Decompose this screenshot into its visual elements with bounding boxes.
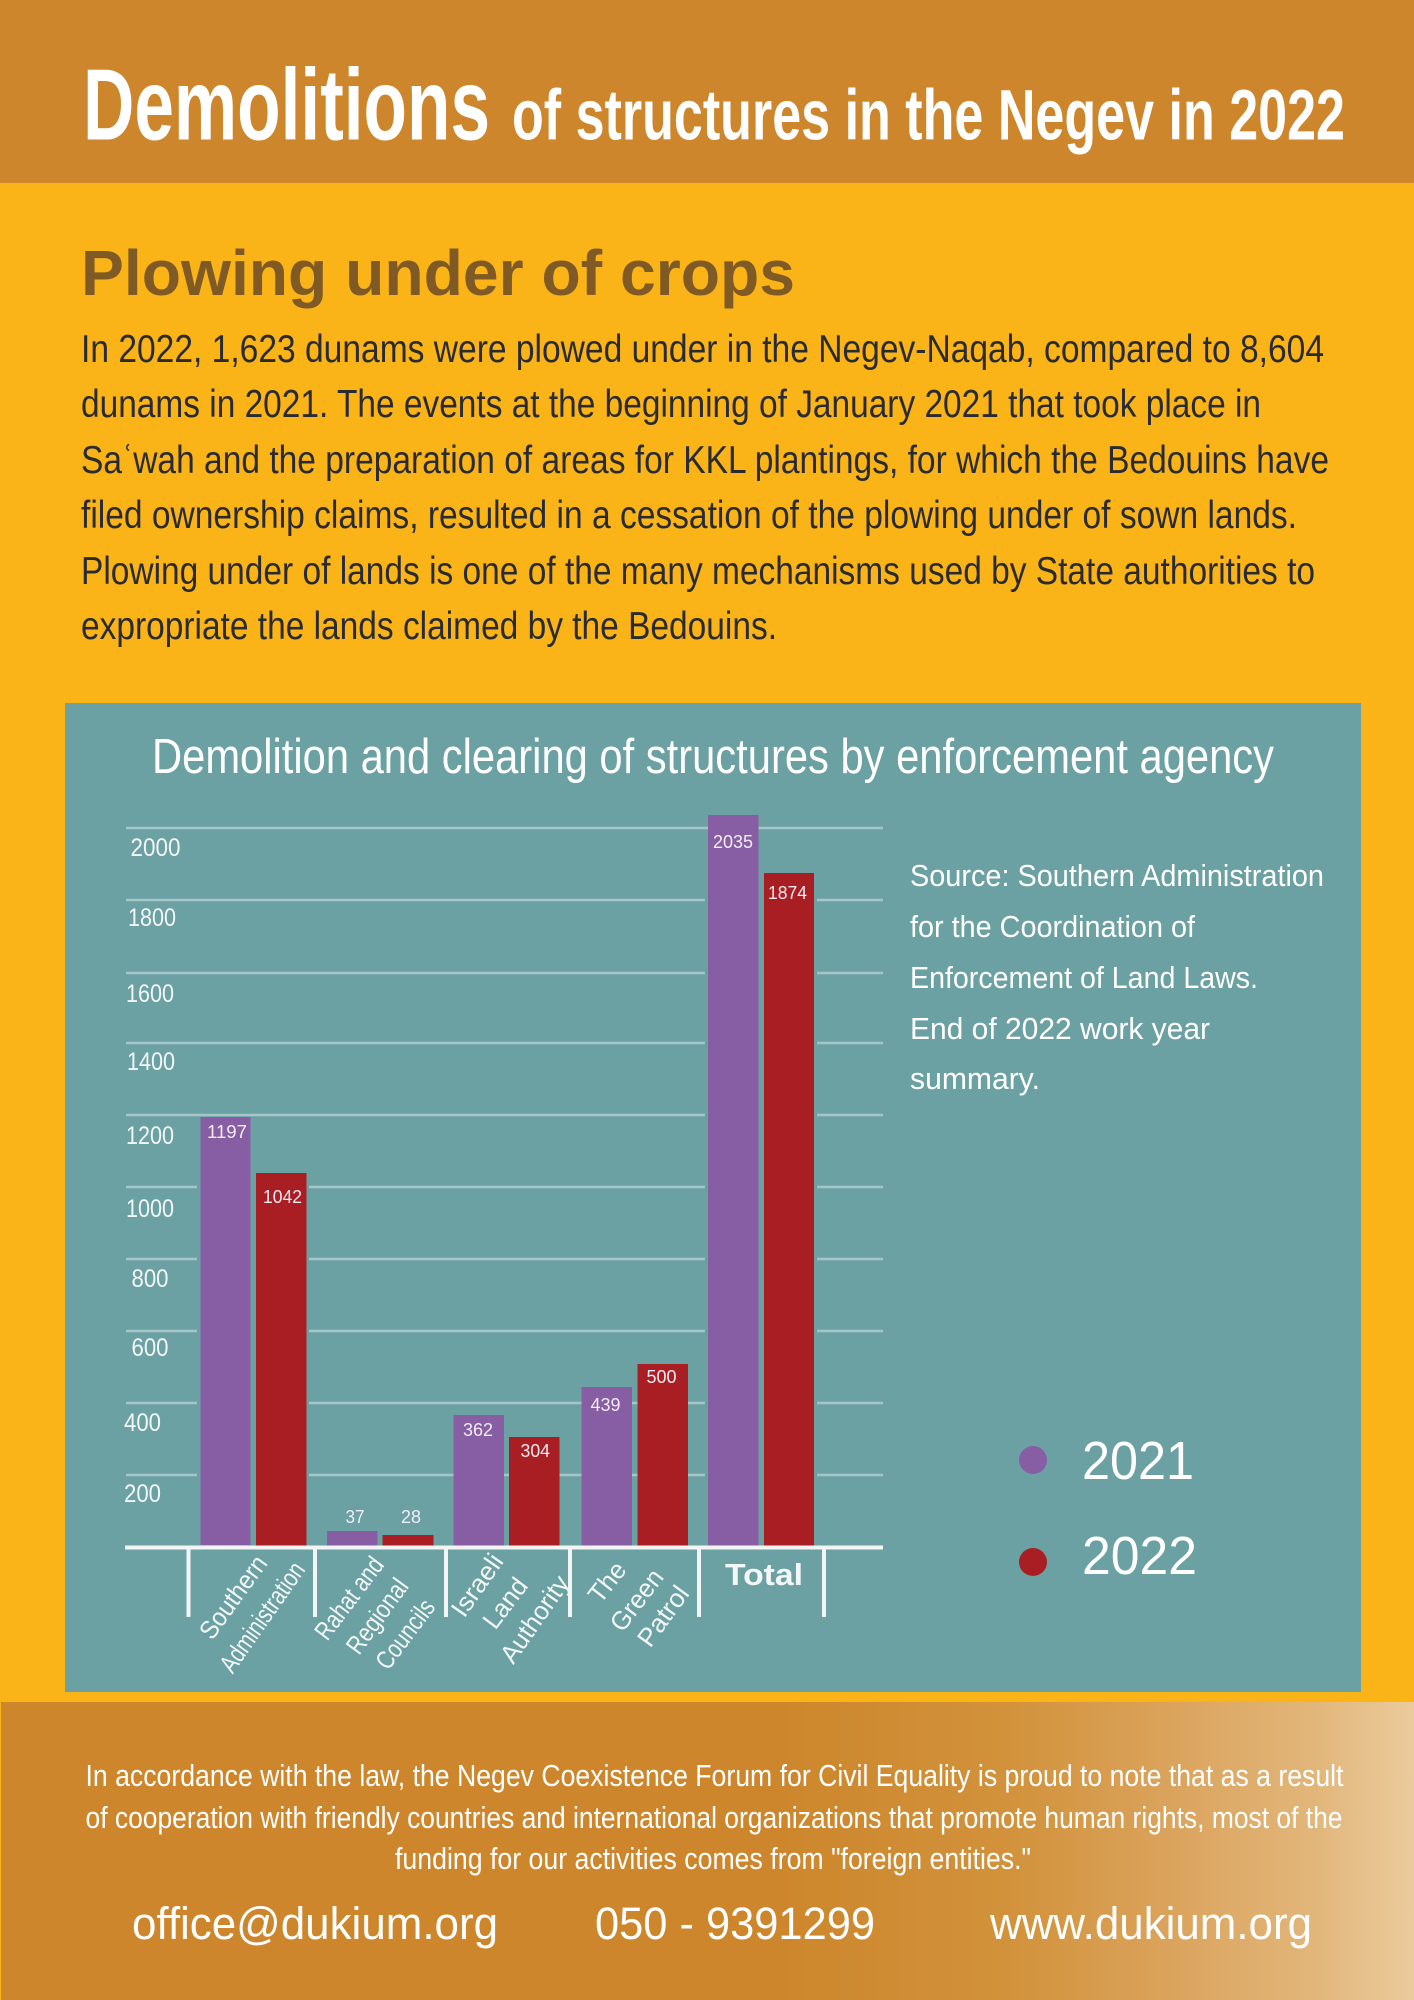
category labels — [193, 1548, 803, 1678]
bars: The Green Patrol: 439 — [590, 1395, 620, 1415]
y axis labels: 1600 — [126, 980, 174, 1008]
panel: chart — [65, 703, 1361, 1692]
y axis labels: 1200 — [126, 1122, 174, 1150]
category labels: Total — [725, 1557, 803, 1592]
category labels: Land — [476, 1572, 534, 1634]
y axis labels: 800 — [132, 1265, 168, 1293]
y axis labels: 200 — [124, 1480, 161, 1508]
y axis labels: 2000 — [130, 834, 180, 862]
bars: Rahat and Regional Councils: 28 — [401, 1507, 421, 1527]
bars: The Green Patrol: 500 — [646, 1367, 676, 1387]
bars: Southern Administration — [200, 1117, 306, 1546]
y axis labels: 1400 — [127, 1048, 175, 1076]
title — [83, 50, 1345, 162]
bars: Southern Administration: 1197 — [207, 1122, 247, 1142]
category labels: The — [582, 1555, 632, 1609]
text block: plowing description — [81, 328, 1329, 648]
y axis labels — [124, 834, 180, 1508]
contact details: office@dukium.org — [132, 1898, 498, 1949]
footer band — [1, 1702, 1414, 2000]
source note: Enforcement of Land Laws. — [910, 960, 1258, 995]
bars: Israeli Land Authority: 362 — [463, 1420, 493, 1440]
category labels: Councils — [369, 1593, 441, 1675]
funding statement — [86, 1758, 1344, 1876]
bars: Israeli Land Authority — [454, 1415, 560, 1546]
source note: for the Coordination of — [910, 909, 1195, 944]
title: Demolitions — [83, 50, 490, 162]
contact details: www.dukium.org — [989, 1898, 1312, 1949]
category labels: Patrol — [631, 1580, 695, 1652]
bars: Southern Administration: 1042 — [263, 1187, 302, 1207]
category labels: Green — [603, 1563, 670, 1637]
contact details: 050 - 9391299 — [595, 1898, 875, 1949]
bars: Total: 1874 — [768, 883, 807, 903]
bars: The Green Patrol — [582, 1364, 688, 1546]
y axis labels: 1000 — [126, 1195, 174, 1223]
category labels: Israeli — [445, 1548, 509, 1622]
y axis labels: 600 — [132, 1334, 168, 1362]
bars: Total — [708, 815, 814, 1546]
category labels: Administration — [213, 1556, 311, 1678]
source note: summary. — [910, 1061, 1040, 1096]
contact details — [132, 1898, 1312, 1949]
source note — [910, 858, 1324, 1096]
source note: Source: Southern Administration — [910, 858, 1324, 893]
bars: Israeli Land Authority: 304 — [520, 1441, 550, 1461]
y axis labels: 1800 — [128, 904, 176, 932]
bar chart — [124, 815, 883, 1678]
text block: plowing description: expropriate the lands claimed by the Bedouins. — [81, 605, 777, 648]
category labels: Southern — [193, 1549, 273, 1645]
x axis and tick marks — [125, 1548, 883, 1617]
y axis labels: 400 — [124, 1409, 161, 1437]
heading: plowing under of crops: Plowing under of crops — [81, 237, 795, 309]
category labels: Regional — [340, 1572, 414, 1660]
funding statement: funding for our activities comes from "foreign entities." — [395, 1841, 1031, 1876]
legend: 2021 — [1082, 1431, 1194, 1491]
source note: End of 2022 work year — [910, 1011, 1210, 1046]
legend: 2022 — [1082, 1526, 1197, 1586]
bars: Rahat and Regional Councils: 37 — [346, 1507, 364, 1527]
bars: Total: 2035 — [713, 832, 753, 852]
category labels: Authority — [494, 1569, 575, 1669]
bars: Rahat and Regional Councils — [327, 1507, 434, 1546]
legend — [1019, 1431, 1197, 1586]
category labels: Rahat and — [308, 1551, 390, 1645]
header band with title — [0, 0, 1414, 183]
